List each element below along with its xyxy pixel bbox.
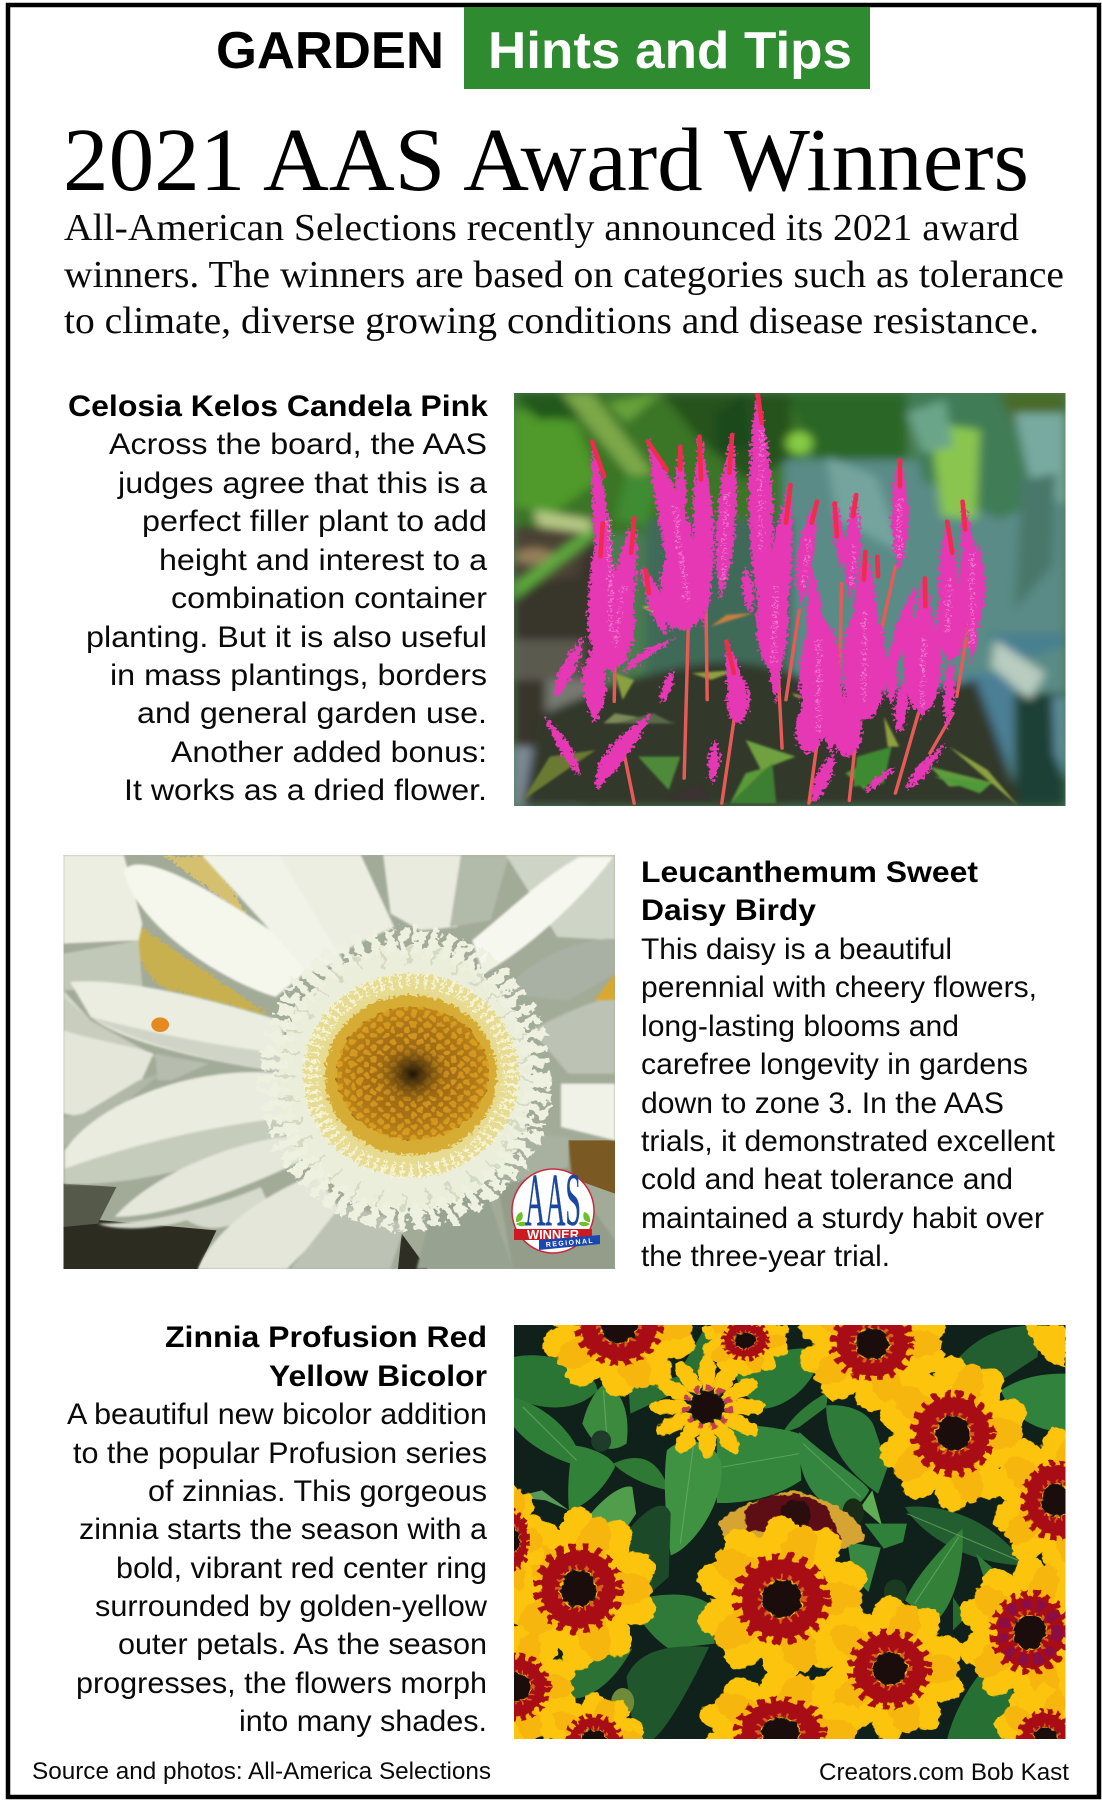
text block: Leucanthemum xyxy=(641,856,1056,1273)
body: daisy description: carefree longevity in gardens xyxy=(641,1048,1028,1081)
body: Celosia description: planting. But it is also useful xyxy=(86,621,487,654)
body: Celosia description xyxy=(86,428,487,807)
flowers xyxy=(455,1257,1102,1798)
intro paragraph: winners. The winners are based on categories such as tolerance xyxy=(64,254,1064,296)
plume red tips xyxy=(592,395,965,673)
AAS winner regional badge xyxy=(512,1159,600,1253)
header xyxy=(216,7,870,89)
photo: white daisy with badge xyxy=(64,855,615,1269)
label: GARDEN: GARDEN xyxy=(216,22,444,80)
photo: yellow and red zinnias xyxy=(514,1325,1066,1739)
plume highlights xyxy=(609,430,972,733)
heading: Zinnia Profusion Red Yellow Bicolor: Zinnia Profusion Red xyxy=(165,1321,487,1354)
badge leaves xyxy=(516,1212,590,1226)
buds xyxy=(591,1430,907,1716)
honeycomb disc xyxy=(337,1007,489,1140)
heading: Celosia Kelos Candela Pink: Celosia Kelos Candela Pink xyxy=(68,390,488,423)
ribbon text: REGIONAL xyxy=(546,1238,594,1249)
intro paragraph: All-American Selections recently announced its 2021 award xyxy=(64,207,1019,249)
body: Celosia description: in mass plantings, borders xyxy=(110,659,487,692)
heading: Leucanthemum Sweet Daisy Birdy: Leucanthemum Sweet xyxy=(641,856,978,889)
orange spot xyxy=(151,1017,169,1032)
body: zinnia description: bold, vibrant red center ring xyxy=(116,1552,487,1585)
body: daisy description: down to zone 3. In the AAS xyxy=(641,1087,1004,1120)
body: daisy description: trials, it demonstrated excellent xyxy=(641,1125,1056,1158)
petals xyxy=(64,855,615,1269)
artist credit: Creators.com Bob Kast xyxy=(819,1759,1069,1786)
banner text: WINNER xyxy=(527,1227,580,1242)
body: daisy description: cold and heat tolerance and xyxy=(641,1163,1013,1196)
leaf midribs xyxy=(523,1390,1018,1604)
yellow floret band xyxy=(304,974,518,1177)
blue ribbon xyxy=(539,1235,600,1250)
infographic page: AAS xyxy=(525,1159,581,1242)
body: zinnia description: outer petals. As the season xyxy=(118,1628,487,1661)
green header box xyxy=(464,7,870,89)
source credit: Source and photos: All-America Selections xyxy=(32,1758,491,1785)
body: zinnia description: surrounded by golden-yellow xyxy=(95,1590,487,1623)
heading: Zinnia Profusion Red Yellow Bicolor xyxy=(165,1321,487,1393)
body: Celosia description: height and interest to a xyxy=(159,544,487,577)
body: zinnia description: progresses, the flowers morph xyxy=(76,1667,487,1700)
heading: Leucanthemum Sweet Daisy Birdy xyxy=(641,856,978,927)
body: daisy description xyxy=(641,933,1056,1273)
intro paragraph: to climate, diverse growing conditions and disease resistance. xyxy=(64,300,1039,342)
base foliage xyxy=(523,607,1018,806)
text block: Zinnia xyxy=(67,1321,487,1738)
title: 2021 AAS Award Winners xyxy=(63,111,1029,210)
body: Celosia description: and general garden use. xyxy=(137,697,487,730)
body: Celosia description: perfect filler plant to add xyxy=(142,505,487,538)
heading: Zinnia Profusion Red Yellow Bicolor: Yellow Bicolor xyxy=(269,1360,487,1393)
body: zinnia description: A beautiful new bicolor addition xyxy=(67,1398,487,1431)
body: zinnia description: to the popular Profusion series xyxy=(73,1437,487,1470)
body: Celosia description: judges agree that this is a xyxy=(117,467,487,500)
badge disc xyxy=(512,1169,594,1253)
stems xyxy=(614,546,970,803)
photo: pink celosia plant xyxy=(514,393,1066,806)
body: Celosia description: Across the board, the AAS xyxy=(109,428,487,461)
body: Celosia description: Another added bonus: xyxy=(171,736,487,769)
body: zinnia description: zinnia starts the season with a xyxy=(79,1513,487,1546)
body: daisy description: maintained a sturdy habit over xyxy=(641,1202,1044,1235)
floret fringe xyxy=(274,940,537,1217)
leaves xyxy=(514,1325,1066,1739)
plumes xyxy=(544,393,985,803)
body: zinnia description: into many shades. xyxy=(239,1705,487,1738)
body: daisy description: This daisy is a beautiful xyxy=(641,933,952,966)
text block: Celosia xyxy=(68,390,488,807)
body: daisy description: the three-year trial. xyxy=(641,1240,890,1273)
red banner xyxy=(514,1229,592,1240)
body: daisy description: perennial with cheery flowers, xyxy=(641,971,1037,1004)
body: Celosia description: It works as a dried flower. xyxy=(124,774,487,807)
intro paragraph xyxy=(64,207,1064,342)
back pollen xyxy=(135,927,268,1015)
body: daisy description: long-lasting blooms and xyxy=(641,1010,959,1043)
heading: Leucanthemum Sweet Daisy Birdy: Daisy Birdy xyxy=(641,894,816,927)
body: zinnia description xyxy=(67,1398,487,1738)
label: Hints and Tips: Hints and Tips xyxy=(488,22,852,80)
body: zinnia description: of zinnias. This gorgeous xyxy=(148,1475,487,1508)
body: Celosia description: combination container xyxy=(171,582,487,615)
